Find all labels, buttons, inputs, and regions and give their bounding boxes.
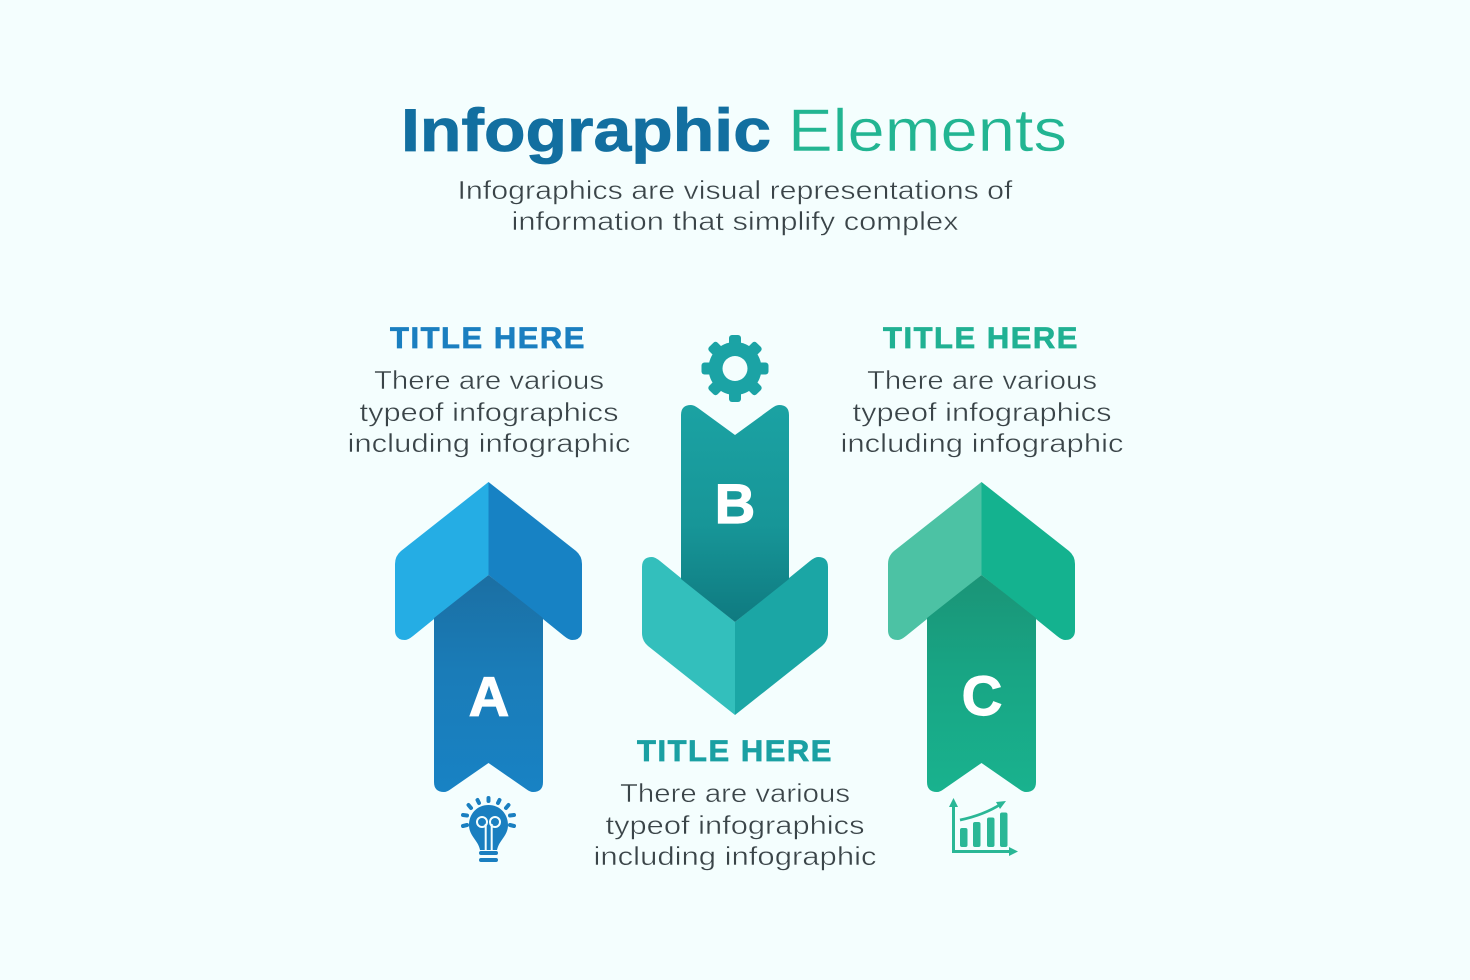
panel: A text: There are various (374, 365, 604, 395)
panel: A text: typeof infographics (360, 397, 618, 427)
title (401, 97, 1067, 164)
arrow C (888, 482, 1075, 792)
panel: C text: TITLE HERE (883, 322, 1079, 355)
title: Infographic (401, 97, 771, 164)
letter B: B (715, 472, 755, 535)
subtitle: Infographics are visual representations of (458, 175, 1013, 205)
title: Elements (788, 97, 1067, 164)
panel: B text (594, 735, 876, 871)
icon: light bulb (463, 798, 514, 860)
panel: C text: typeof infographics (852, 397, 1112, 427)
letter A: A (469, 665, 509, 728)
subtitle (458, 175, 1013, 236)
panel: B text: typeof infographics (606, 810, 864, 840)
panel: B text: TITLE HERE (637, 735, 833, 768)
icon: growth chart (949, 798, 1018, 856)
panel: A text (348, 322, 630, 458)
icon: gear (702, 335, 768, 402)
arrow A (395, 482, 582, 792)
letter C: C (962, 664, 1002, 727)
subtitle: information that simplify complex (512, 206, 958, 236)
panel: C text: There are various (867, 365, 1097, 395)
panel: A text: including infographic (348, 428, 630, 458)
panel: A text: TITLE HERE (390, 322, 586, 355)
panel: C text (840, 322, 1124, 458)
arrow B (642, 405, 828, 715)
panel: C text: including infographic (840, 428, 1124, 458)
panel: B text: There are various (620, 778, 850, 808)
panel: B text: including infographic (594, 841, 876, 871)
